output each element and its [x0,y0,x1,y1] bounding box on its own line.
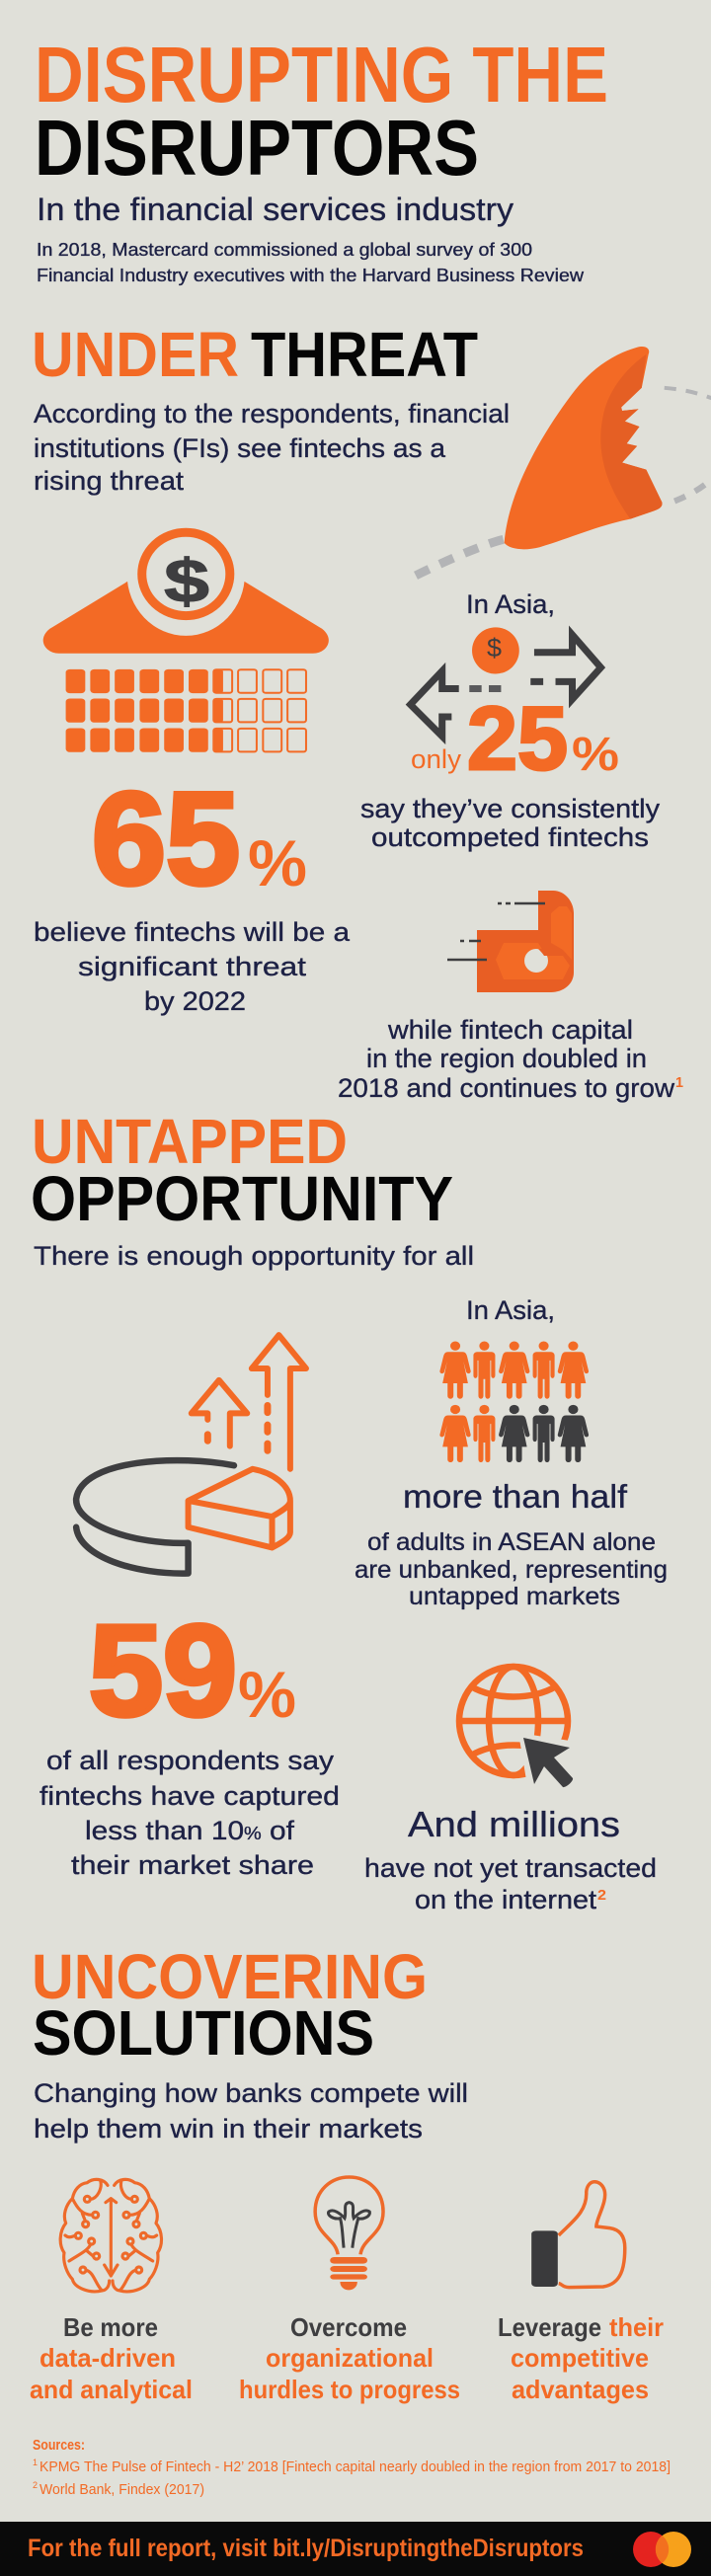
footer bar [0,2522,711,2576]
unbanked description: of adults in ASEAN alone [367,1528,656,1556]
stat: 65%: % [248,826,307,899]
intro text: Financial Industry executives with the Harvard Business Review [37,266,585,285]
solution 2 text: Overcome [290,2312,407,2342]
stat: 59% [89,1598,296,1743]
stat: 65%: 65 [92,766,240,912]
coin dollar: $ [487,633,503,663]
sources: 1 [33,2458,38,2467]
59% description: of all respondents say [46,1746,335,1775]
solution 1 text: and analytical [30,2375,193,2404]
more than half text: more than half [403,1478,628,1515]
sources: Sources: [33,2437,85,2454]
stat: only 25% [411,689,619,789]
fintech capital text: in the region doubled in [366,1044,647,1073]
solution 2 text [239,2312,460,2404]
heading: under threat: THREAT [251,319,478,390]
fintech capital text: while fintech capital [387,1015,633,1045]
solution 2 text: hurdles to progress [239,2375,460,2404]
solution 3 text [498,2312,664,2404]
dollar sign on bank: $ [164,548,209,616]
icon: thumbs up [531,2182,625,2288]
unbanked description: untapped markets [409,1583,620,1610]
title: DISRUPTING THE [35,31,608,118]
internet description: on the internet [415,1885,597,1914]
internet description: 2 [597,1887,606,1904]
under threat description: According to the respondents, financial [34,399,510,429]
sources [33,2437,671,2498]
and millions text: And millions [408,1804,620,1844]
solutions description: help them win in their markets [34,2114,423,2144]
grid of outlined cells [213,669,306,751]
footer call to action: For the full report, visit bit.ly/DisruptingtheDisruptors [28,2535,584,2562]
stat: only 25%: 25 [467,689,568,789]
intro text [37,240,585,285]
heading: uncovering solutions: UNCOVERING [32,1941,428,2012]
solution 3 text: advantages [512,2375,649,2404]
unbanked description: are unbanked, representing [355,1556,668,1584]
sources: 2 [33,2480,38,2490]
fintech capital text [338,1015,683,1103]
solution 3 text: their [609,2312,664,2342]
icon: bank with dollar coin [43,512,329,752]
59% description [40,1746,340,1880]
icon: brain [60,2179,161,2292]
title [35,31,608,192]
fintech capital text: 2018 and continues to grow [338,1073,675,1103]
icon: light bulb [315,2177,383,2290]
heading: untapped opportunity: OPPORTUNITY [31,1163,453,1234]
25% description: say they’ve consistently [360,794,661,823]
heading: under threat: UNDER [32,319,239,390]
65% description: by 2022 [144,986,246,1016]
stat: 59%: 59 [89,1598,237,1743]
solutions description [34,2078,468,2144]
title: DISRUPTORS [35,104,479,192]
internet description: have not yet transacted [364,1853,657,1883]
icon: shark fin with dashed path [411,347,711,579]
icon: competing arrows with coin [411,627,600,737]
under threat description: rising threat [34,466,185,496]
heading: untapped opportunity [31,1106,453,1234]
intro text: In 2018, Mastercard commissioned a global survey of 300 [37,240,532,260]
grid of filled cells [66,669,223,752]
label: in asia: In Asia, [466,589,555,619]
solution 1 text: Be more [63,2312,158,2342]
solutions description: Changing how banks compete will [34,2078,468,2108]
roof [43,546,329,654]
under threat description: institutions (FIs) see fintechs as a [34,433,446,463]
59% description: less than 10 % of [85,1816,295,1845]
heading: uncovering solutions [32,1941,428,2069]
label: in asia: In Asia, [466,1295,555,1325]
65% description: significant threat [78,952,307,981]
fintech capital text: 1 [675,1074,683,1091]
under threat description [34,399,510,496]
solution 1 text: data-driven [40,2343,176,2373]
subtitle: In the financial services industry [37,192,514,227]
icon: pie with rising arrows [76,1335,306,1574]
opportunity description: There is enough opportunity for all [34,1241,474,1271]
25% description [360,794,661,852]
65% description: believe fintechs will be a [34,917,351,947]
solution 1 text [30,2312,193,2404]
icon: mastercard logo [633,2532,691,2567]
25% description: outcompeted fintechs [371,822,649,852]
59% description: their market share [71,1850,314,1880]
solution 3 text: competitive [511,2343,649,2373]
unbanked description [355,1528,668,1610]
stat: only 25%: % [572,729,619,781]
heading: under threat [32,319,478,390]
sources: World Bank, Findex (2017) [40,2481,204,2498]
icon: globe with cursor [459,1667,583,1792]
heading: untapped opportunity: UNTAPPED [32,1106,348,1177]
solution 2 text: organizational [266,2343,434,2373]
icon: fintech capital shark bite [447,891,574,992]
heading: uncovering solutions: SOLUTIONS [33,1997,374,2069]
65% description [34,917,351,1016]
sources: KPMG The Pulse of Fintech - H2’ 2018 [Fintech capital nearly doubled in the region from 2017 to 2018] [40,2459,671,2475]
stat: only 25%: only [411,744,462,774]
solution 3 text: Leverage [498,2312,601,2342]
internet description [364,1853,657,1914]
icon: people pictogram [439,1342,589,1462]
stat: 65% [92,766,307,912]
stat: 59%: % [238,1658,296,1731]
59% description: fintechs have captured [40,1781,340,1811]
